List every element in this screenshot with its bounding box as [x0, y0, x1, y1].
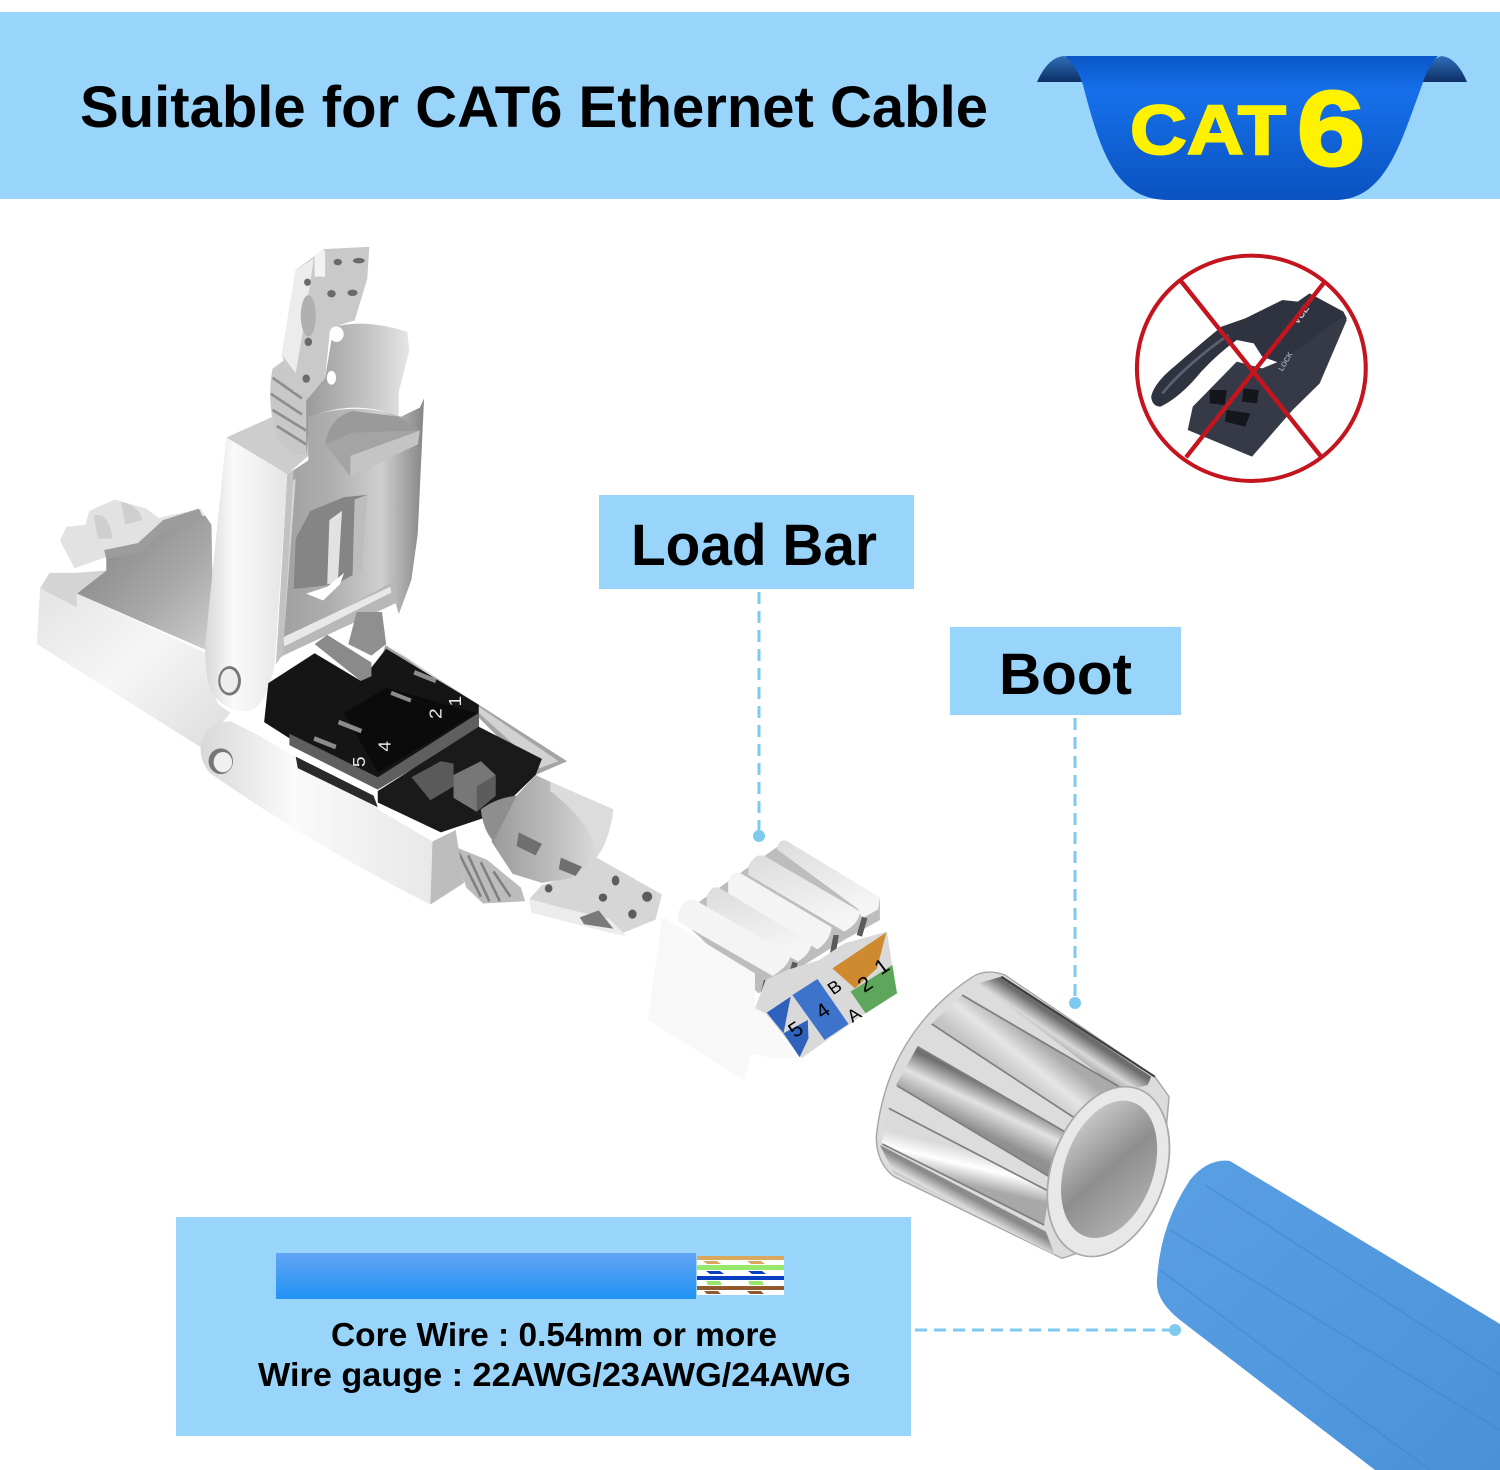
colour terminals: A — [843, 1004, 865, 1026]
pin labels: 1 — [445, 696, 465, 707]
lower lid — [201, 721, 464, 904]
boot facets — [978, 977, 1151, 1092]
load bar module — [648, 841, 897, 1080]
icon: crossed-out crimping tool: VCE — [1291, 303, 1312, 327]
module body — [648, 917, 798, 1080]
specification text: Core Wire : 0.54mm or more — [331, 1316, 777, 1353]
panel: cable specification — [176, 1217, 911, 1436]
upper lid — [205, 398, 424, 711]
colour terminals: 1 — [870, 954, 894, 979]
specification text: Wire gauge : 22AWG/23AWG/24AWG — [258, 1356, 851, 1393]
callout: Boot — [950, 627, 1181, 1009]
black wire core block — [264, 635, 567, 832]
lower strain relief — [454, 775, 662, 936]
boot bore — [1026, 1073, 1190, 1271]
callout: Boot: Boot — [999, 642, 1132, 707]
upper posts and hinge pin — [348, 612, 386, 656]
colour terminals: 4 — [811, 999, 835, 1023]
blue cable — [1157, 1161, 1500, 1470]
callout: Load Bar — [599, 495, 914, 842]
callout: Load Bar: Load Bar — [631, 513, 877, 578]
icon: crossed-out crimping tool — [1137, 256, 1366, 481]
left plug body — [37, 499, 230, 747]
boot — [876, 972, 1190, 1271]
CAT6 ribbon badge: 6 — [1297, 70, 1365, 188]
pin labels: 5 — [349, 756, 369, 767]
cable diagram — [276, 1253, 784, 1299]
colour terminals — [767, 932, 897, 1057]
prohibition sign — [1137, 256, 1366, 481]
colour terminals: B — [824, 976, 846, 999]
title: Suitable for CAT6 Ethernet Cable — [80, 75, 988, 140]
specification text — [258, 1316, 851, 1393]
pin labels: 4 — [374, 741, 394, 752]
callout leader: cable — [915, 1324, 1181, 1336]
colour terminals: 5 — [784, 1017, 808, 1042]
upper strain relief — [270, 247, 409, 456]
CAT6 ribbon badge — [1037, 56, 1467, 200]
colour terminals: 2 — [853, 972, 877, 997]
crimper handle — [1151, 293, 1347, 407]
CAT6 ribbon badge: CAT — [1130, 91, 1286, 169]
hinge hole — [209, 748, 233, 774]
connector illustration — [37, 247, 662, 936]
pin labels: 2 — [425, 708, 446, 719]
crimper body — [1188, 317, 1347, 457]
icon: crossed-out crimping tool: LOCK — [1276, 350, 1295, 373]
hinge hole — [218, 666, 241, 696]
module fins — [678, 841, 880, 997]
top banner — [0, 12, 1500, 200]
pin labels — [349, 696, 465, 767]
